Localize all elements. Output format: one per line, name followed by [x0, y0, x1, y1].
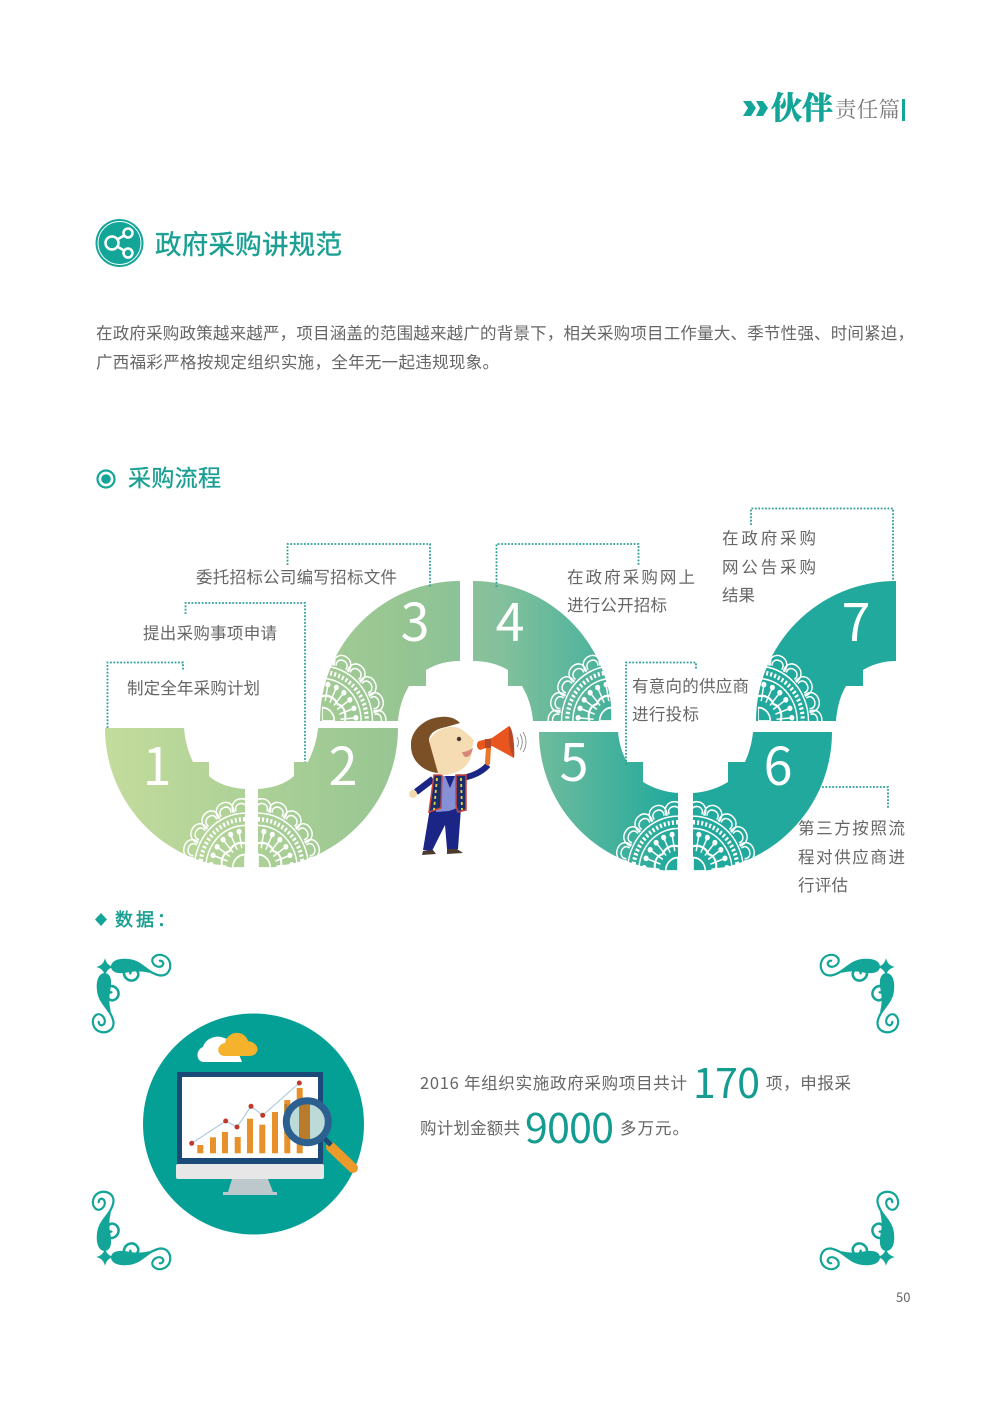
step 4 label: 在政府采购网上	[567, 564, 695, 588]
segment 6: 6	[764, 725, 792, 800]
shoes	[422, 849, 463, 855]
data label: 数据：	[115, 906, 175, 932]
step 5 label: 进行投标	[632, 701, 699, 725]
ornament: top left corner	[93, 955, 170, 1032]
monitor screen	[182, 1077, 318, 1158]
section title: 政府采购讲规范	[155, 223, 342, 262]
step 6 label: 第三方按照流	[798, 815, 905, 839]
segment 3: 3	[401, 581, 429, 656]
megaphone hand	[485, 748, 491, 765]
data statement: 购计划金额共	[420, 1115, 520, 1139]
legs	[423, 808, 461, 851]
segment 4: 4	[496, 581, 524, 656]
step 7 label: 网公告采购	[722, 554, 816, 578]
icon: diamond	[95, 913, 107, 926]
mouth	[462, 748, 473, 757]
step 5 label	[632, 673, 749, 725]
step 4 label: 进行公开招标	[567, 592, 667, 616]
segment 3	[317, 581, 460, 730]
page number: 50	[896, 1287, 910, 1306]
step 5 label: 有意向的供应商	[632, 673, 749, 697]
segment 5	[539, 721, 683, 880]
robe bands	[429, 775, 466, 812]
ornament: bottom right corner	[821, 1192, 898, 1269]
step 1 label: 制定全年采购计划	[127, 675, 260, 699]
left hand	[409, 790, 417, 798]
step 4 label	[567, 564, 695, 616]
step labels	[127, 525, 905, 896]
bar chart	[197, 1088, 303, 1153]
header tag: partner responsibility	[743, 83, 905, 128]
segment 7: 7	[842, 581, 870, 656]
step 3 label: 委托招标公司编写招标文件	[196, 564, 397, 588]
intro paragraph: 广西福彩严格按规定组织实施，全年无一起违规现象。	[96, 349, 499, 373]
segment 1	[105, 725, 250, 877]
step 7 label	[722, 525, 816, 606]
vest	[436, 776, 460, 812]
segment 7	[753, 581, 896, 730]
monitor frame	[177, 1072, 323, 1164]
segment 4	[473, 581, 617, 730]
header calligraphy word: 伙伴	[771, 83, 833, 128]
megaphone	[477, 726, 514, 758]
ornament: top right corner	[821, 955, 898, 1032]
line chart	[189, 1080, 302, 1146]
subheading: data	[95, 906, 175, 932]
ornament: bottom left corner	[93, 1192, 170, 1269]
segment 1: 1	[143, 725, 171, 800]
subheading icon: target	[98, 470, 114, 488]
step 6 label: 程对供应商进	[798, 844, 905, 868]
clouds	[197, 1033, 258, 1062]
icon: double chevrons	[743, 101, 768, 116]
data statement	[420, 1050, 851, 1155]
step 7 label: 在政府采购	[722, 525, 816, 549]
hair	[411, 717, 460, 773]
data statement: 2016 年组织实施政府采购项目共计	[420, 1070, 687, 1094]
data illustration: monitor with chart in teal circle	[143, 1014, 364, 1234]
intro paragraph: 在政府采购政策越来越严，项目涵盖的范围越来越广的背景下，相关采购项目工作量大、季节性强、时间紧迫，	[96, 320, 914, 344]
monitor stand	[223, 1179, 277, 1195]
process diagram: seven arc segments	[105, 581, 896, 880]
magnifying glass	[284, 1101, 353, 1168]
left arm	[416, 779, 433, 792]
dotted leader lines	[108, 508, 893, 809]
step 6 label: 行评估	[798, 872, 848, 896]
step 2 label: 提出采购事项申请	[143, 620, 277, 644]
segment 2: 2	[329, 725, 357, 800]
subheading: procurement process: 采购流程	[128, 459, 221, 493]
step 7 label: 结果	[722, 582, 755, 606]
data statement: 项，申报采	[766, 1070, 851, 1094]
segment 2	[253, 725, 398, 877]
big number: 9000: 9000	[525, 1095, 614, 1155]
right arm	[458, 765, 488, 778]
section icon: share nodes	[96, 219, 144, 267]
header bar	[902, 99, 905, 121]
character with megaphone	[409, 717, 526, 855]
step 6 label	[798, 815, 905, 896]
segment 6	[688, 725, 832, 880]
eye	[457, 737, 461, 741]
segment 5: 5	[560, 721, 588, 796]
teal circle	[143, 1014, 364, 1234]
intro paragraph	[96, 320, 914, 373]
face	[429, 727, 474, 775]
data statement: 多万元。	[620, 1115, 689, 1139]
monitor base	[176, 1164, 324, 1179]
header word: 责任篇	[835, 93, 900, 124]
sound waves	[517, 732, 526, 752]
big number: 170: 170	[693, 1050, 760, 1110]
